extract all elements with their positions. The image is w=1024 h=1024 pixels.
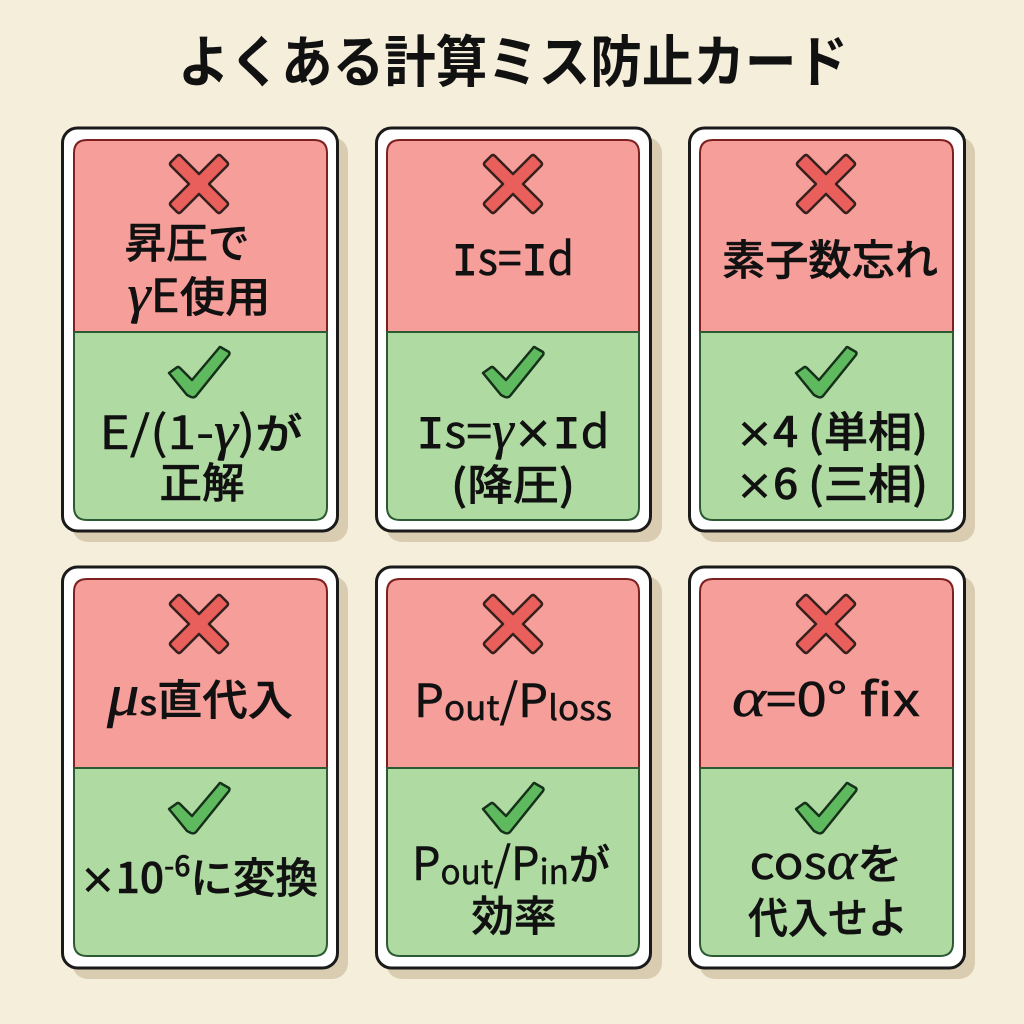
wrong text: Is=Id — [452, 223, 574, 289]
card 1: step-up gamma E — [62, 128, 348, 542]
icon: cross — [170, 155, 228, 213]
right text: cosαを — [750, 827, 902, 893]
icon: check — [169, 347, 230, 397]
card 6: alpha fix — [690, 567, 975, 979]
wrong text — [124, 210, 270, 326]
right text: P — [412, 828, 441, 894]
right text: in — [539, 845, 569, 894]
right text: ×6 (三相) — [736, 451, 928, 512]
right text: が — [569, 832, 610, 893]
wrong text: μs直代入 — [106, 662, 293, 728]
right text: (降圧) — [451, 452, 575, 513]
icon: cross — [170, 595, 228, 653]
icon: check — [483, 783, 544, 833]
right text: Is=γ×Id — [416, 396, 610, 462]
right text: 代入せよ — [748, 885, 908, 946]
right text: に変換 — [190, 845, 318, 906]
card 4: mu s direct — [62, 567, 348, 979]
icon: check — [796, 783, 856, 833]
wrong text: loss — [548, 681, 612, 730]
wrong text: γE使用 — [128, 260, 270, 326]
icon: check — [169, 783, 230, 833]
right text: out — [440, 845, 494, 894]
right text — [736, 399, 928, 512]
icon: check — [483, 347, 544, 397]
icon: check — [796, 347, 856, 397]
card 3: forgot element count — [690, 128, 975, 542]
right text: /P — [493, 828, 539, 894]
title: よくある計算ミス防止カード — [178, 18, 848, 99]
icon: cross — [797, 595, 855, 653]
right text: 効率 — [472, 883, 556, 944]
wrong text: 昇圧で — [124, 210, 250, 271]
right text — [748, 827, 908, 946]
icon: cross — [484, 595, 542, 653]
icon: cross — [484, 155, 542, 213]
right text — [416, 396, 610, 513]
card 2: Is=Id — [376, 128, 662, 542]
wrong text: P — [414, 665, 443, 731]
wrong text: 素子数忘れ — [722, 227, 938, 288]
wrong text: /P — [500, 665, 548, 731]
icon: cross — [797, 155, 855, 213]
right text: ×10 — [80, 845, 164, 906]
right text: E/(1-γ)が — [100, 397, 302, 463]
right text — [100, 397, 302, 511]
right text: -6 — [164, 845, 190, 885]
wrong text: α=0° fix — [732, 664, 920, 730]
right text: 正解 — [160, 450, 244, 511]
wrong text: out — [444, 681, 500, 730]
right text: ×4 (単相) — [736, 399, 928, 460]
right text — [412, 828, 610, 944]
card 5: Pout/Ploss — [376, 567, 662, 979]
